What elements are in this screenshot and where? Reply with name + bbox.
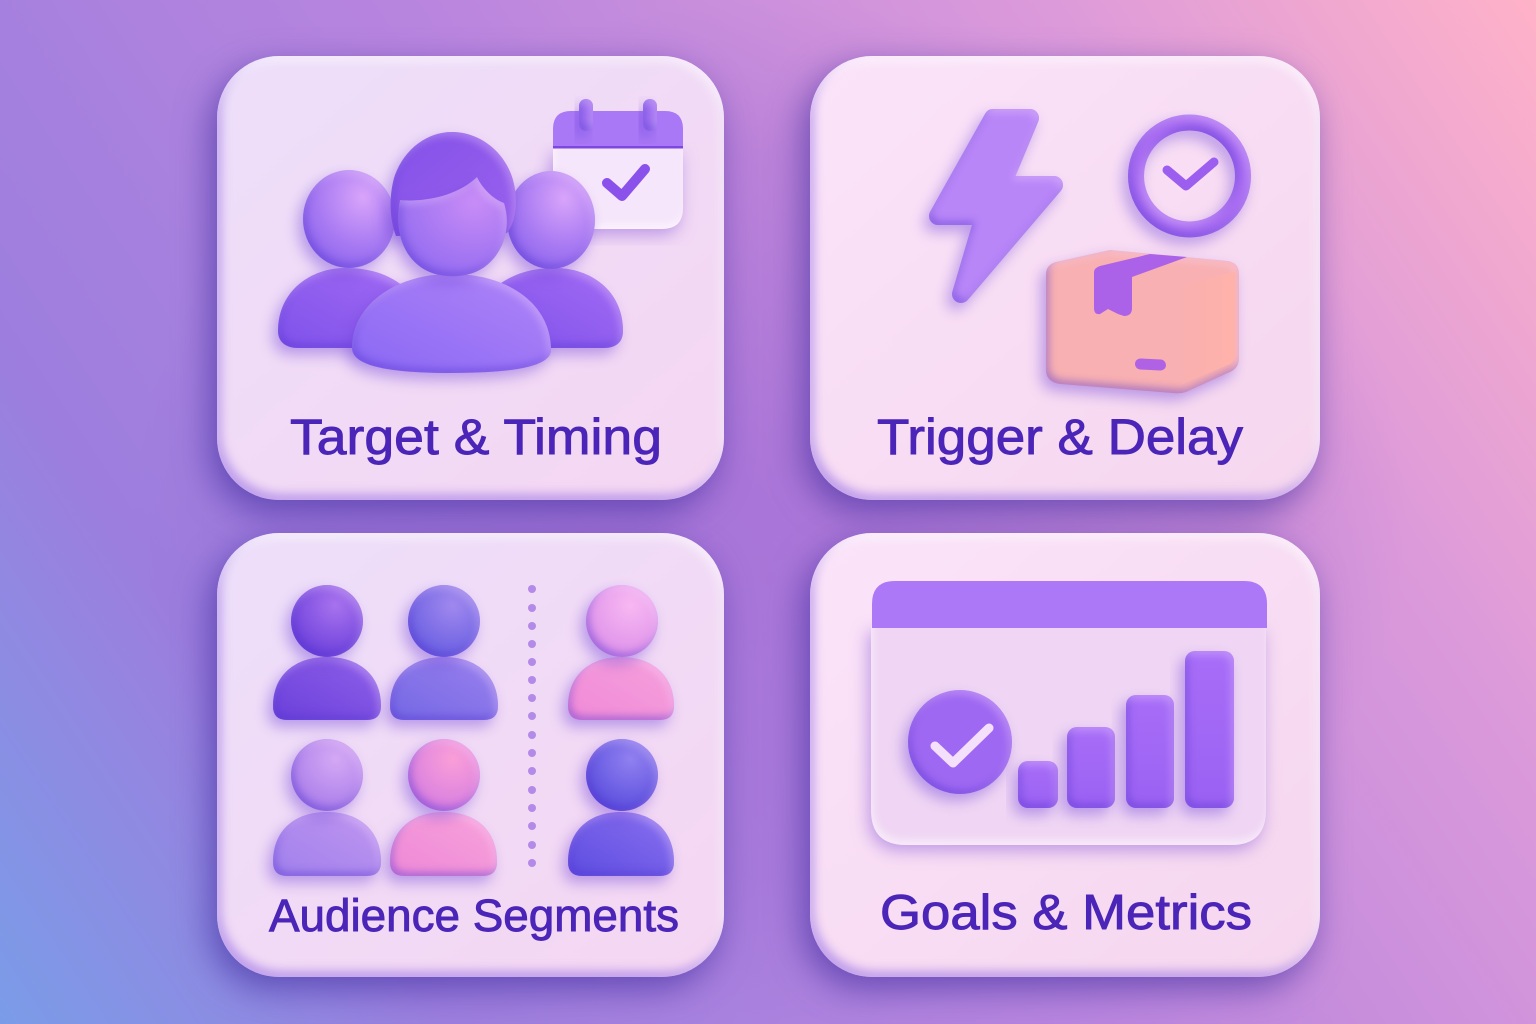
window title bar bbox=[872, 581, 1267, 628]
icon: lightning bolt bbox=[938, 118, 1054, 294]
icon: person indigo bbox=[568, 739, 674, 876]
icon: left person bbox=[278, 170, 420, 348]
icon: check badge bbox=[908, 690, 1012, 794]
panel: Target & Timing bbox=[217, 56, 724, 500]
window body bbox=[871, 626, 1266, 845]
dashboard window bbox=[871, 581, 1267, 845]
heading: Audience Segments: Audience Segments bbox=[269, 890, 679, 941]
icon: package box bbox=[1046, 250, 1239, 393]
icon: person pink top bbox=[568, 585, 674, 720]
heading: Goals & Metrics: Goals & Metrics bbox=[880, 886, 1252, 940]
icon: person deep purple bbox=[273, 585, 381, 720]
icon: right person bbox=[484, 171, 623, 348]
panel: Goals & Metrics bbox=[810, 533, 1320, 977]
icon: person lavender bbox=[273, 739, 381, 876]
icon: centre person bbox=[352, 132, 551, 373]
panel: Audience Segments bbox=[217, 533, 724, 977]
icon: calendar bbox=[553, 99, 683, 229]
card bbox=[217, 533, 724, 977]
card bbox=[810, 533, 1320, 977]
heading: Target & Timing: Target & Timing bbox=[290, 409, 662, 465]
icon: clock check bbox=[1136, 122, 1243, 230]
bar chart bbox=[1018, 651, 1234, 808]
card bbox=[217, 56, 724, 500]
card bbox=[810, 56, 1320, 500]
panel: Trigger & Delay bbox=[810, 56, 1320, 500]
heading: Trigger & Delay: Trigger & Delay bbox=[877, 409, 1243, 465]
icon: person blue violet bbox=[390, 585, 498, 720]
icon: person rose bbox=[390, 739, 497, 876]
dotted divider bbox=[528, 585, 536, 867]
